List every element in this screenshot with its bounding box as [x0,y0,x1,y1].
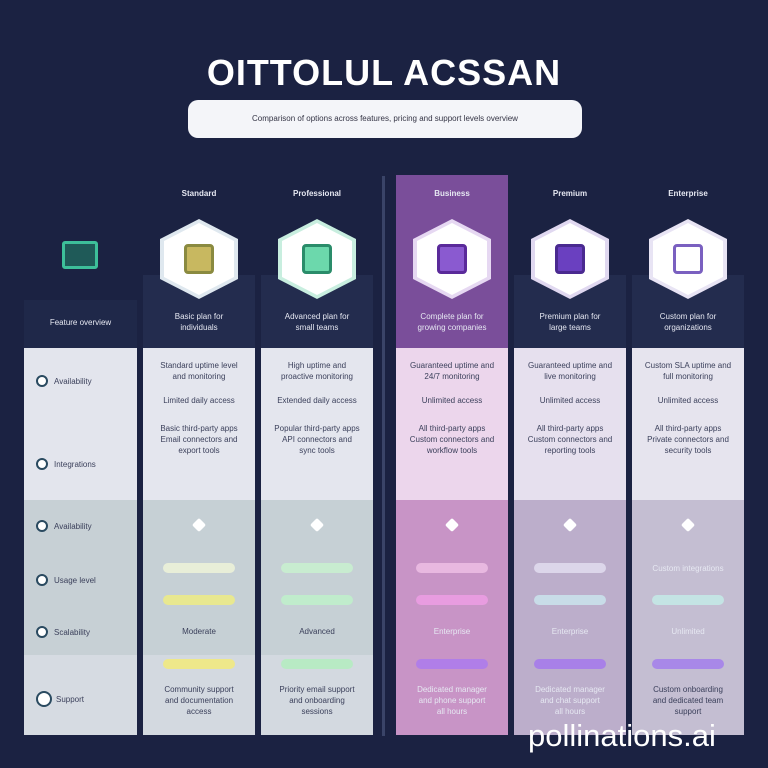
column 5: support [675,707,701,716]
column 4: Premium plan for [540,312,600,321]
label column: Support [56,695,84,704]
column 5: Private connectors and [647,435,729,444]
column 5: organizations [664,323,712,332]
column 1: Standard uptime level [160,361,238,370]
label column: Scalability [54,628,90,637]
column 1: Basic plan for [175,312,223,321]
column 3 highlighted: Custom connectors and [410,435,494,444]
icon hex [413,219,491,299]
column 3 highlighted: Business [434,189,470,198]
column 4: reporting tools [545,446,595,455]
column 1: export tools [178,446,220,455]
column 1: individuals [180,323,218,332]
column 4: live monitoring [544,372,596,381]
column 1 [143,189,255,735]
column 2: Extended daily access [277,396,357,405]
column 5: Unlimited access [658,396,718,405]
column 1: and monitoring [173,372,225,381]
column 3 highlighted: Unlimited access [422,396,482,405]
column 4: Premium [553,189,587,198]
subtitle pill [188,100,582,138]
rows [24,348,137,500]
label column [24,241,137,735]
column 3 highlighted: Enterprise [434,627,470,636]
column 1: Community support [164,685,234,694]
title: OITTOLUL ACSSAN [207,52,561,93]
divider [382,176,385,736]
icon hex [278,219,356,299]
column 2: sync tools [299,446,335,455]
column 4: Guaranteed uptime and [528,361,612,370]
label column: Integrations [54,460,96,469]
label column: Feature overview [50,318,111,327]
column 5 [632,189,744,735]
column 3 highlighted: Dedicated manager [417,685,487,694]
column 4: All third-party apps [537,424,603,433]
column 2: Professional [293,189,341,198]
column 2: Advanced plan for [285,312,349,321]
column 4: large teams [549,323,591,332]
column 4: Enterprise [552,627,588,636]
column 3 highlighted: and phone support [419,696,485,705]
column 2: proactive monitoring [281,372,353,381]
column 1: Basic third-party apps [160,424,238,433]
column 3 highlighted: All third-party apps [419,424,485,433]
column 5: security tools [665,446,711,455]
icon hex [649,219,727,299]
column 1: Email connectors and [161,435,237,444]
column 1: Limited daily access [163,396,235,405]
column 3 highlighted: all hours [437,707,467,716]
column 5: and dedicated team [653,696,723,705]
label column: Availability [54,377,92,386]
column 2: API connectors and [282,435,352,444]
column 2: High uptime and [288,361,346,370]
column 4: Dedicated manager [535,685,605,694]
icon: label [62,241,98,269]
column 1: access [187,707,211,716]
column 5: Custom integrations [652,564,724,573]
column 5: Enterprise [668,189,708,198]
watermark: pollinations.ai [528,718,716,753]
column 2: small teams [296,323,338,332]
column 1: Standard [182,189,216,198]
column 4: Custom connectors and [528,435,612,444]
column 4: and chat support [540,696,600,705]
column 4: Unlimited access [540,396,600,405]
icon hex [531,219,609,299]
column 2 [261,189,373,735]
column 3 highlighted: workflow tools [427,446,477,455]
column 2: and onboarding [289,696,345,705]
column 5: All third-party apps [655,424,721,433]
column 3 highlighted: growing companies [418,323,486,332]
column 4: all hours [555,707,585,716]
column 5: Custom onboarding [653,685,723,694]
label column: Availability [54,522,92,531]
column 5: Unlimited [671,627,705,636]
column 3 highlighted [396,175,508,735]
column 3 highlighted: 24/7 monitoring [424,372,480,381]
column 2: Advanced [299,627,335,636]
column 3 highlighted: Complete plan for [420,312,484,321]
icon hex [160,219,238,299]
subtitle pill: Comparison of options across features, pricing and support levels overview [252,114,518,123]
column 3 highlighted: Guaranteed uptime and [410,361,494,370]
label column: Usage level [54,576,96,585]
column 2: sessions [301,707,333,716]
column 1: Moderate [182,627,216,636]
column 5: Custom SLA uptime and [645,361,731,370]
column 5: full monitoring [663,372,713,381]
column 5: Custom plan for [660,312,716,321]
column 2: Priority email support [279,685,355,694]
column 4 [514,189,626,735]
column 2: Popular third-party apps [274,424,360,433]
column 1: and documentation [165,696,233,705]
